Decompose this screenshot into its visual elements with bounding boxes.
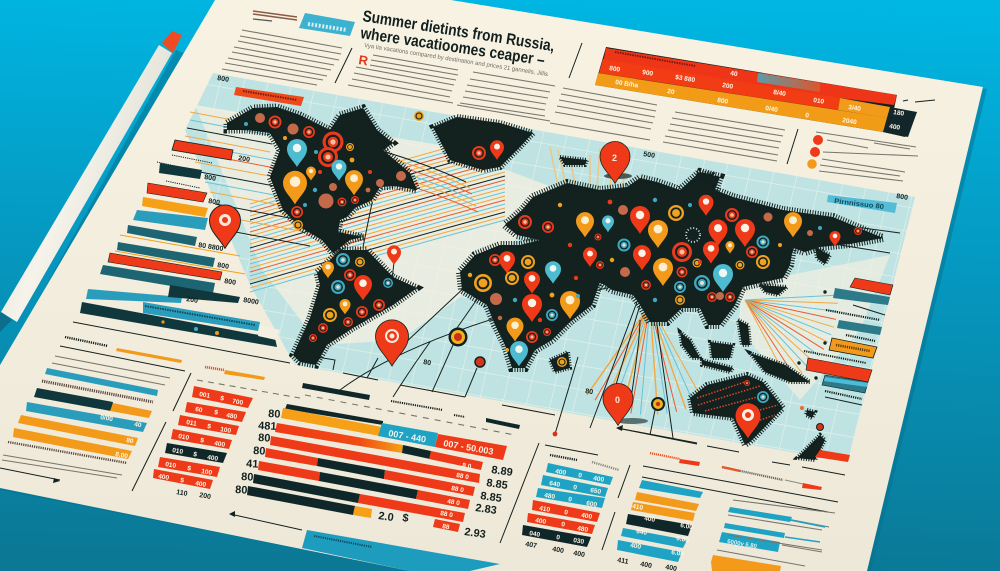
- center chart: 2.83: [475, 502, 497, 517]
- map tag: blue: Pirnnissuo 80: [834, 198, 884, 211]
- markers: Eurasia: [518, 195, 862, 305]
- center chart: 007 - 440: [388, 428, 427, 445]
- center chart: 2.0: [378, 510, 394, 524]
- continent: Australia: [690, 375, 783, 445]
- center chart: 48 0: [447, 498, 461, 507]
- center chart: 80: [268, 408, 281, 421]
- big pin: left: [210, 205, 240, 248]
- center chart: 88 0: [451, 485, 465, 494]
- map pointer lines: [340, 203, 673, 438]
- big pin: Arctic: 2: [612, 153, 617, 163]
- blue price table: 400: [535, 517, 547, 526]
- continent: Greenland: [433, 117, 533, 170]
- red price table: 200: [199, 492, 211, 501]
- dot marker: [475, 357, 485, 367]
- red price table: 010: [165, 461, 177, 470]
- orange and blue price table: 6.00: [680, 522, 694, 531]
- center chart: 007 - 50.003: [443, 438, 494, 457]
- blue price table: 0: [573, 484, 578, 492]
- drop cap: R: [358, 52, 370, 69]
- ring marker: [448, 328, 468, 346]
- blue price table: 040: [529, 530, 541, 539]
- red price table: 010: [172, 447, 184, 456]
- markers: South America: [309, 245, 401, 342]
- center chart: 8.89: [491, 464, 513, 479]
- blue price table: [522, 445, 619, 559]
- top price table: 200: [722, 82, 734, 91]
- big pin: Arctic: [600, 142, 632, 184]
- top price table: 3/40: [848, 104, 862, 113]
- map open ocean wash: [195, 105, 560, 345]
- blue price table: 480: [577, 525, 589, 534]
- center chart: 8 0: [462, 462, 472, 471]
- top price table: 800: [609, 65, 621, 74]
- chart arrow: [229, 511, 302, 530]
- map labels: 80: [423, 359, 432, 367]
- blue price table: 400: [593, 475, 605, 484]
- text block: column three: [457, 72, 555, 121]
- top price table: $3 880: [675, 74, 696, 84]
- legend bullets: [807, 132, 918, 181]
- red price table: 400: [158, 473, 170, 482]
- red price table: $: [214, 409, 219, 417]
- orange and blue price table: 6.00: [671, 549, 685, 558]
- blue price table: 407: [525, 541, 537, 550]
- New Zealand label: [800, 406, 850, 462]
- red price table: 001: [199, 391, 211, 400]
- top price table: 2040: [842, 117, 857, 126]
- left list: 800: [204, 174, 216, 183]
- center chart: 80: [235, 484, 248, 497]
- blue price table: 400: [555, 468, 567, 477]
- header label: [253, 11, 297, 21]
- top price table: [595, 47, 917, 137]
- orange and blue price table: 410: [632, 503, 644, 512]
- top price table: 400: [889, 123, 901, 132]
- center chart: $: [402, 512, 409, 525]
- blue price table: 0: [561, 521, 566, 529]
- bottom left panel: 0/00: [100, 414, 114, 423]
- left list: 800: [217, 262, 229, 271]
- map labels: 80: [585, 388, 594, 396]
- bottom left panel: 40: [134, 421, 142, 429]
- red price table: 110: [176, 489, 188, 498]
- orange and blue price table: 640: [636, 528, 648, 537]
- blue price table: 400: [581, 512, 593, 521]
- red price table: 700: [232, 398, 244, 407]
- orange and blue price table: 6.00: [676, 535, 690, 544]
- top price table: 0: [805, 112, 810, 120]
- blue price table: 0: [578, 472, 583, 480]
- top price table: 180: [893, 109, 905, 118]
- right list: [797, 278, 893, 405]
- left list: 200: [238, 155, 250, 164]
- bottom left panel: 80: [126, 437, 134, 445]
- blue price table: 0: [564, 509, 569, 517]
- markers: North America: [244, 111, 504, 230]
- islands: [550, 157, 830, 460]
- text block: column four: [550, 88, 657, 140]
- text block: intro: [222, 30, 342, 85]
- pencil: [0, 31, 192, 332]
- left list: 8000: [243, 297, 259, 306]
- center chart: 2.93: [464, 526, 486, 541]
- text block: column two: [348, 55, 458, 103]
- top right note: [903, 100, 935, 102]
- long data row: [80, 302, 280, 347]
- orange and blue price table: 411: [617, 557, 629, 566]
- left list: 200: [186, 296, 198, 305]
- orange and blue price table: 400: [644, 515, 656, 524]
- orange and blue price table: 400: [640, 561, 652, 570]
- center chart: 80: [241, 471, 254, 484]
- map tag: red: [234, 87, 304, 106]
- center chart: 8.85: [480, 490, 502, 505]
- map background: [185, 73, 915, 462]
- markers: Africa: [468, 247, 604, 367]
- left list: 800: [208, 198, 220, 207]
- pin: Australia: [736, 380, 769, 438]
- bottom right panel: 6000v 6.80: [727, 539, 758, 550]
- red price table: 010: [178, 433, 190, 442]
- red price table: 400: [214, 440, 226, 449]
- blue price table: 0: [556, 534, 561, 542]
- blue price table: 410: [539, 505, 551, 514]
- red price table: $: [193, 451, 198, 459]
- left list: [86, 140, 259, 306]
- orange and blue price table: [617, 453, 838, 571]
- blue price table: 400: [552, 546, 564, 555]
- orange and blue price table: 400: [630, 542, 642, 551]
- ring marker: Indian Ocean: [651, 397, 665, 411]
- red price table: [153, 367, 300, 501]
- blue price table: 480: [544, 492, 556, 501]
- red price table: 60: [195, 406, 203, 414]
- title: where vacatioomes ceaper –: [359, 25, 546, 69]
- blue price table: 400: [573, 550, 585, 559]
- center chart: 80: [258, 432, 271, 445]
- blue price table: 030: [573, 537, 585, 546]
- red price table: $: [200, 437, 205, 445]
- blue price table: 0: [568, 496, 573, 504]
- center chart: 88 0: [456, 472, 470, 481]
- small caption: [391, 401, 520, 429]
- red price table: $: [220, 395, 225, 403]
- top price table: 0/40: [765, 105, 779, 114]
- blue price table: 640: [549, 480, 561, 489]
- continent: South America: [293, 250, 417, 365]
- text block: column five: [663, 112, 785, 161]
- subtitle: Vya Iia vacations compared by destination and prices 21 gannelis, Jillis: [364, 43, 548, 78]
- bottom left panel: 8.00: [115, 451, 129, 460]
- bottom left panel: [0, 322, 290, 483]
- dot marker: low: [553, 432, 557, 436]
- center chart: 80: [253, 445, 266, 458]
- dividers: [335, 43, 798, 164]
- map arrow: [616, 425, 697, 443]
- top price table: 900: [642, 69, 654, 78]
- left list: 800: [224, 278, 236, 287]
- red price table: 011: [186, 419, 198, 428]
- blue price table: 600: [586, 500, 598, 509]
- teal header box: [299, 13, 355, 36]
- red price table: $: [207, 423, 212, 431]
- red price table: 100: [201, 468, 213, 477]
- top price table: 00 B/ha: [615, 79, 639, 90]
- top price table: 40: [730, 70, 738, 78]
- center chart: [235, 383, 515, 541]
- center chart: 41: [246, 458, 259, 471]
- big pin: Indian Ocean: 0: [615, 395, 620, 405]
- red price table: $: [180, 477, 185, 485]
- map tag: blue: [827, 195, 897, 213]
- top price table: 8/40: [773, 89, 787, 98]
- red price table: 400: [207, 454, 219, 463]
- section dividers: [132, 373, 630, 550]
- center chart: 88 0: [440, 510, 454, 519]
- continent: Eurasia and Africa: [460, 172, 883, 368]
- continent: North America: [227, 107, 417, 253]
- blue price table: 650: [590, 487, 602, 496]
- red price table: 480: [226, 412, 238, 421]
- map labels: 500: [643, 151, 655, 160]
- big pin: South Atlantic: [376, 320, 408, 366]
- map frame ticks: [317, 357, 845, 475]
- flight routes: [185, 112, 900, 415]
- center chart: 8.85: [486, 477, 508, 492]
- map labels: 800: [896, 193, 908, 202]
- top price table: 010: [813, 97, 825, 106]
- center chart: 481: [258, 420, 277, 433]
- red price table: 100: [220, 426, 232, 435]
- big pin: Indian Ocean: [603, 384, 648, 426]
- center chart: 88: [442, 523, 450, 531]
- left list: 80 8800: [198, 242, 224, 253]
- red price table: 400: [195, 480, 207, 489]
- footer tab: [302, 530, 500, 571]
- red price table: $: [187, 465, 192, 473]
- top price table: 20: [667, 88, 675, 96]
- map labels: 800: [217, 75, 229, 84]
- title: Summer dietints from Russia,: [361, 8, 556, 55]
- top price table: 800: [717, 97, 729, 106]
- bottom right panel: [711, 467, 835, 571]
- map labels: [217, 75, 908, 396]
